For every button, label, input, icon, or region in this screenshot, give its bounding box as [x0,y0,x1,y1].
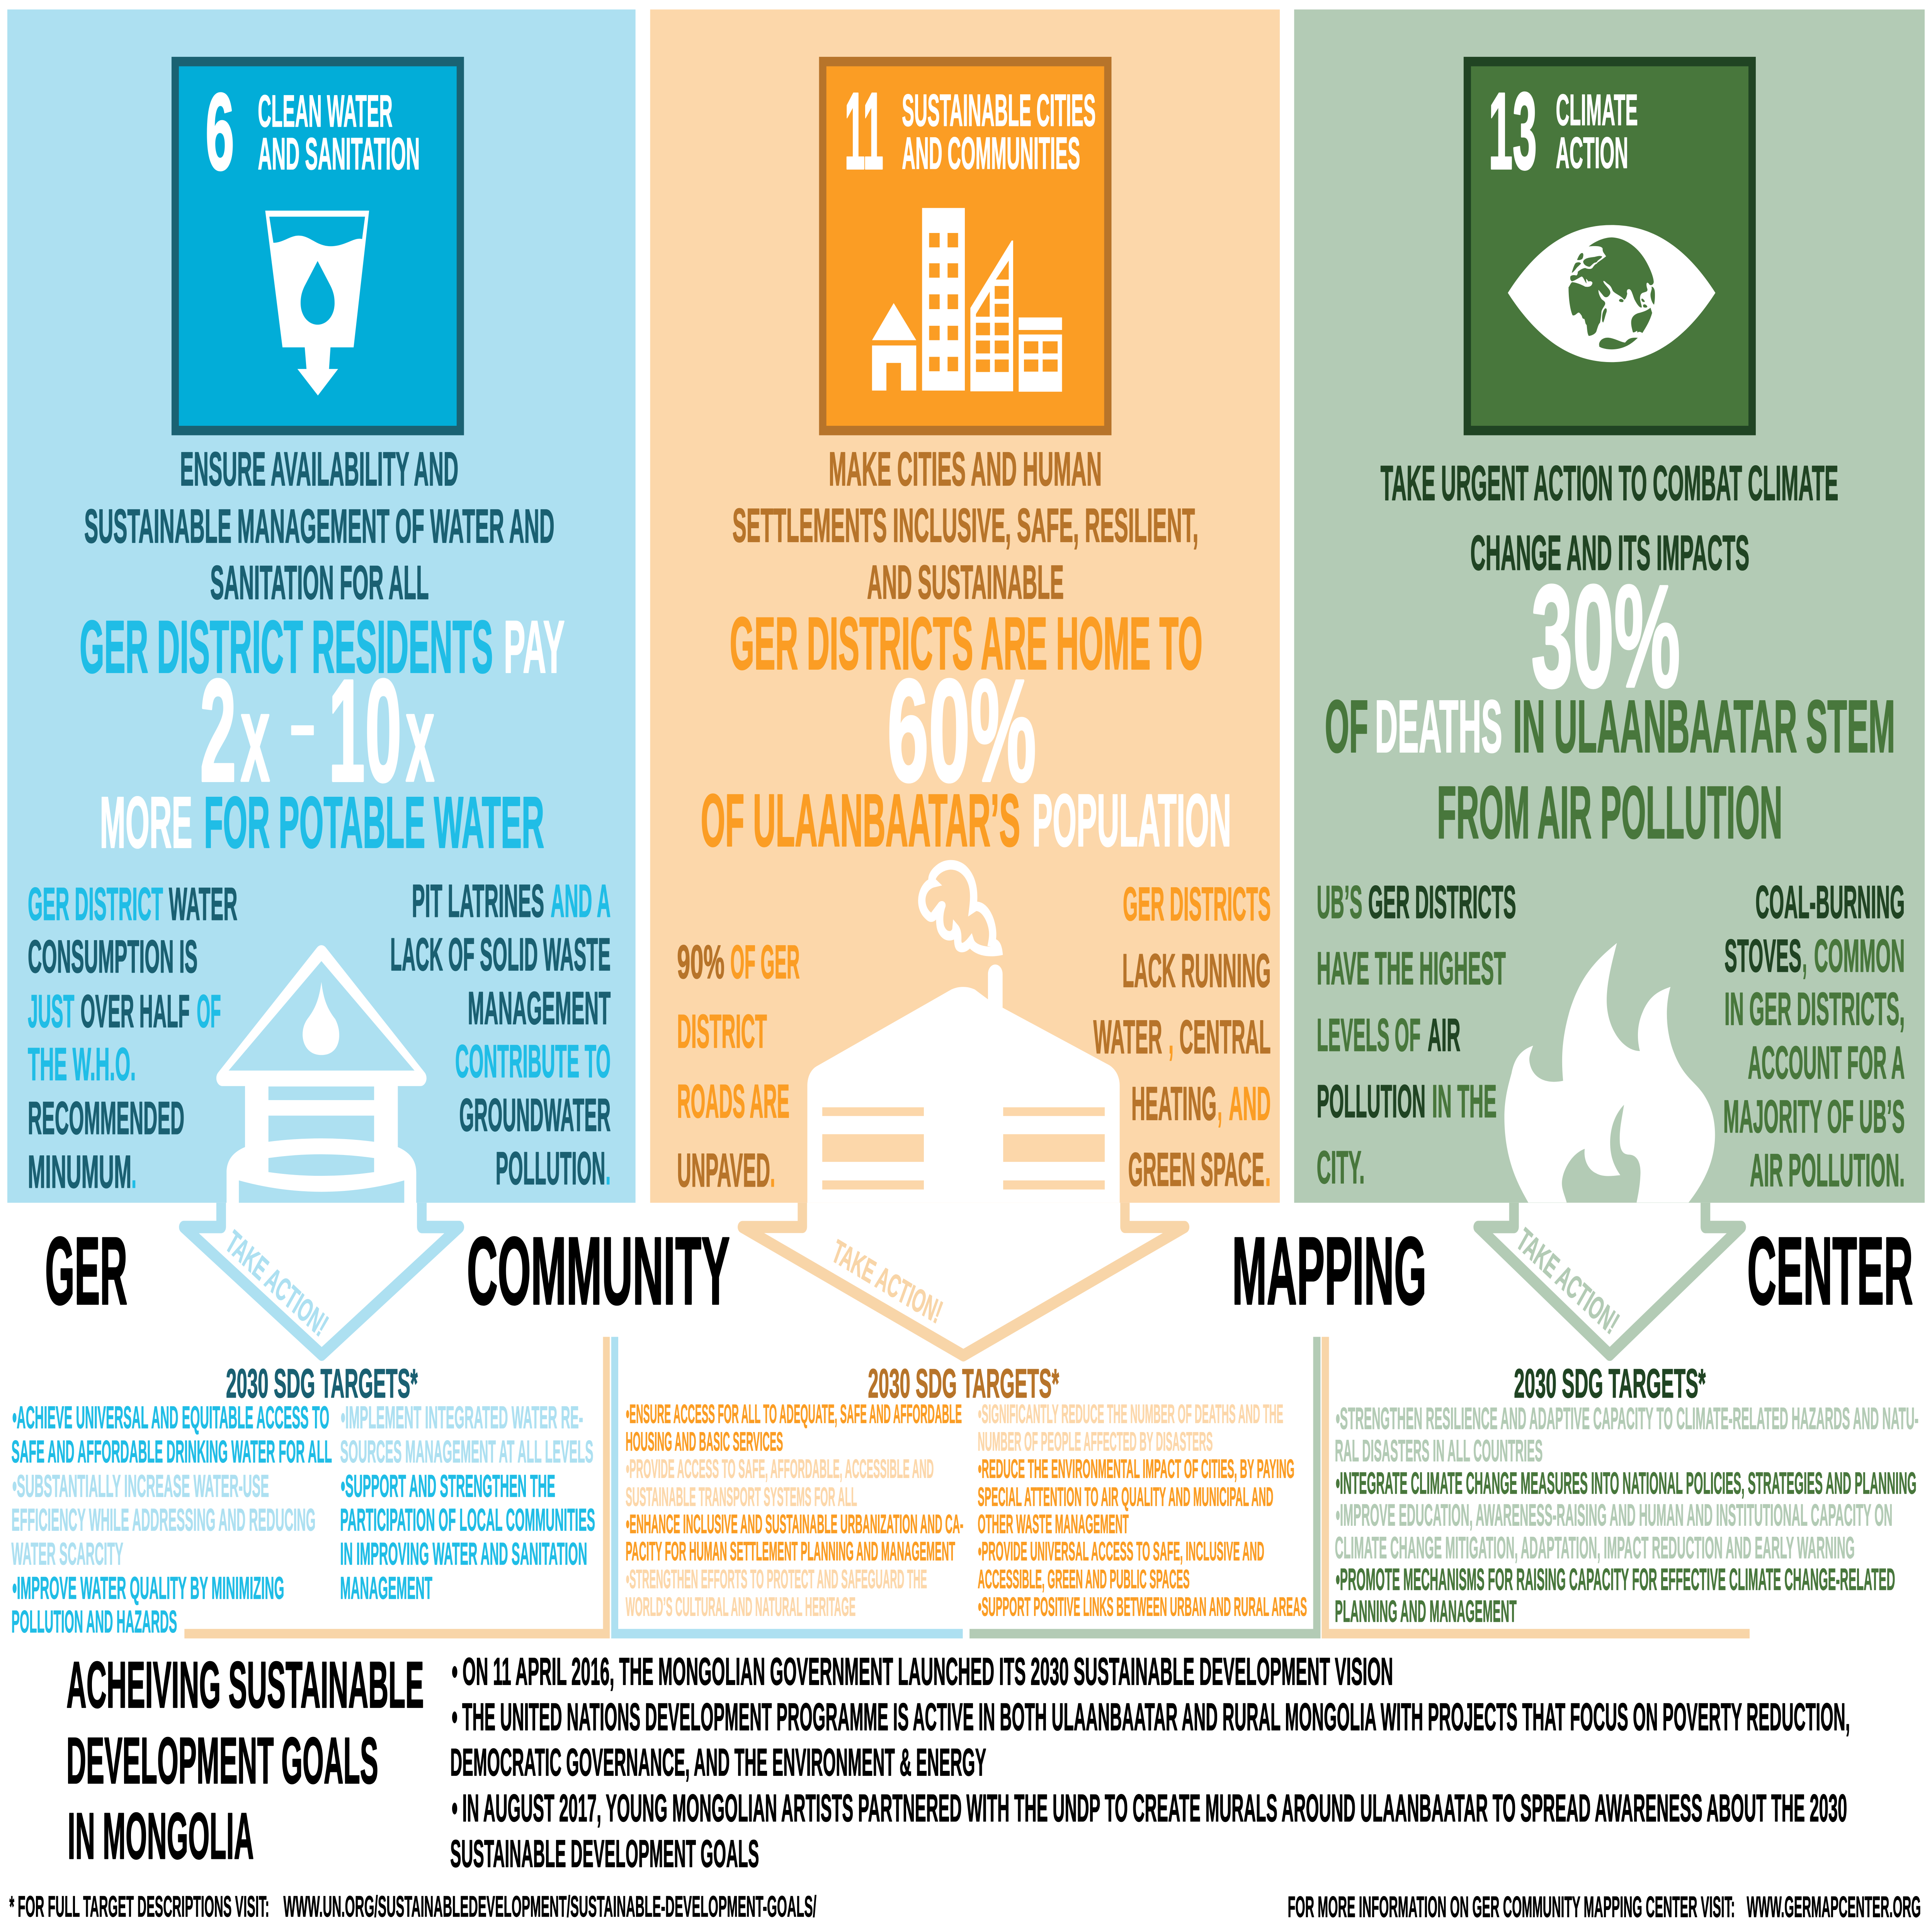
headline statistic: water cost: - [289,684,316,764]
title band: Ger Community Mapping Center: COMMUNITY [467,1217,730,1324]
icon box: SDG 6: 6 [206,71,234,193]
arrow: water take action [184,1203,459,1355]
headline statistic: water cost: PAY [504,605,565,688]
text block: unpaved roads: ROADS ARE [677,1075,789,1128]
targets: cities: ACCESSIBLE, GREEN AND PUBLIC SPACES [978,1564,1190,1594]
text block: groundwater pollution: LACK OF SOLID WASTE [390,929,611,980]
targets: cities: •PROVIDE UNIVERSAL ACCESS TO SAFE, INCLUSIVE AND [978,1536,1264,1566]
text block: water consumption: MINUMUM [28,1146,131,1197]
icon box: SDG 11: SUSTAINABLE CITIES [902,85,1096,136]
panel: SDG 11 sustainable cities: OF GER [730,936,800,988]
text block: groundwater pollution: PIT LATRINES [412,875,544,927]
targets: climate: RAL DISASTERS IN ALL COUNTRIES [1335,1434,1543,1468]
targets heading: water: 2030 SDG TARGETS* [226,1361,418,1406]
icon box: SDG 6 [175,61,460,430]
icon box: SDG 6: CLEAN WATER [258,86,393,136]
text block: lacking services: LACK RUNNING [1122,944,1271,997]
text block: highest pollution levels: GER DISTRICTS [1368,876,1516,928]
headline statistic: water cost: x [241,668,270,807]
text block: water consumption: RECOMMENDED [28,1092,184,1144]
heading: Acheiving Sustainable Development Goals in Mongolia: DEVELOPMENT GOALS [66,1724,378,1797]
text block: lacking services: . [1265,1143,1271,1196]
text block: highest pollution levels: IN THE [1432,1075,1497,1127]
text block: groundwater pollution [390,875,611,1194]
text block: water consumption [28,878,237,1197]
icon: well with water drop [223,953,420,1210]
headline statistic: air pollution deaths: OF [1325,685,1368,768]
text block: water consumption: OF [197,985,221,1037]
frame: orange water targets border [184,1337,610,1638]
footer: target descriptions link: WWW.UN.ORG/SUSTAINABLEDEVELOPMENT/SUSTAINABLE-DEVELOPMENT-GOALS/ [283,1889,816,1923]
panel: SDG 13 climate action [1294,10,1925,1203]
headline statistic: water cost: FOR POTABLE WATER [204,782,544,863]
targets: water: EFFICIENCY WHILE ADDRESSING AND REDUCING [12,1502,316,1537]
text block: water consumption: GER DISTRICT [28,878,163,930]
text block: water consumption: THE W.H.O. [28,1038,136,1090]
footer: target descriptions link: * FOR FULL TARGET DESCRIPTIONS VISIT: [9,1889,269,1923]
icon box: SDG 13: CLIMATE [1556,85,1638,134]
text block: lacking services: HEATING [1131,1077,1216,1130]
footer: target descriptions link [9,1889,816,1923]
text block: lacking services: , [1168,1011,1173,1063]
targets: water: •IMPROVE WATER QUALITY BY MINIMIZING [12,1570,284,1605]
headline statistic: water cost: 2 [200,649,236,812]
text block: Mongolia bullet points: DEMOCRATIC GOVERNANCE, AND THE ENVIRONMENT & ENERGY [450,1741,986,1784]
text block: water consumption: OVER HALF [80,985,190,1037]
text block: groundwater pollution: POLLUTION [496,1143,605,1194]
targets: cities: •ENSURE ACCESS FOR ALL TO ADEQUATE, SAFE AND AFFORDABLE [626,1399,962,1429]
headline statistic: water cost: 10 [328,649,401,812]
goal statement: cities: AND SUSTAINABLE [867,555,1064,609]
targets: cities: •PROVIDE ACCESS TO SAFE, AFFORDABLE, ACCESSIBLE AND [626,1454,934,1483]
text block: Mongolia bullet points [450,1650,1850,1875]
icon: ger with chimney smoke [807,860,1120,1203]
text block: highest pollution levels: UB’S [1317,876,1362,928]
text block: lacking services: GER DISTRICTS [1123,878,1271,930]
headline statistic: water cost: MORE [100,782,192,863]
headline statistic: water cost: GER DISTRICT RESIDENTS [80,605,493,688]
icon box: SDG 11: 11 [845,70,883,192]
targets: cities: HOUSING AND BASIC SERVICES [626,1427,783,1456]
text block: groundwater pollution: MANAGEMENT [468,982,611,1034]
title band: Ger Community Mapping Center: MAPPING [1232,1217,1427,1324]
text block: highest pollution levels: CITY. [1317,1141,1365,1193]
targets: water: •SUPPORT AND STRENGTHEN THE [341,1468,555,1503]
text block: water consumption: CONSUMPTION IS [28,931,197,982]
goal statement: climate [1381,455,1838,580]
text block: water consumption: JUST [28,985,74,1037]
text block: unpaved roads [677,936,800,1197]
text block: highest pollution levels: HAVE THE HIGHEST [1317,942,1506,994]
goal statement: water: SANITATION FOR ALL [210,556,429,609]
icon box: SDG 6: AND SANITATION [258,129,420,179]
arrow: climate take action: TAKE ACTION! [1512,1221,1624,1341]
goal statement: water: SUSTAINABLE MANAGEMENT OF WATER AND [84,499,554,553]
targets: water [12,1361,595,1639]
headline statistic: water cost [80,605,565,863]
text block: coal-burning stoves: STOVES [1725,930,1801,981]
targets: water: WATER SCARCITY [12,1536,123,1571]
targets heading: cities: 2030 SDG TARGETS* [868,1361,1059,1406]
icon box: SDG 13 [1467,61,1752,430]
arrow: cities take action [742,1203,1185,1355]
text block: lacking services: CENTRAL [1179,1011,1271,1063]
text block: lacking services: WATER [1094,1011,1162,1063]
icon: flame [1504,943,1715,1202]
text block: highest pollution levels: AIR [1428,1009,1461,1061]
title band: Ger Community Mapping Center [45,1217,1913,1324]
arrow: water take action: TAKE ACTION! [221,1224,333,1344]
targets: cities: NUMBER OF PEOPLE AFFECTED BY DISASTERS [978,1427,1213,1456]
headline statistic: population [701,602,1231,862]
text: •SUPPORT POSITIVE LINKS BETWEEN URBAN AND RURAL AREAS [978,1592,1307,1621]
targets: cities: •SIGNIFICANTLY REDUCE THE NUMBER OF DEATHS AND THE [978,1399,1283,1429]
text block: highest pollution levels: POLLUTION [1317,1075,1425,1127]
targets: water: POLLUTION AND HAZARDS [12,1604,177,1639]
text block: groundwater pollution: . [605,1143,611,1194]
icon box: SDG 13: ACTION [1556,128,1628,177]
text block: unpaved roads: . [770,1144,775,1197]
icon box: SDG 13: 13 [1488,70,1537,192]
targets: water: •IMPLEMENT INTEGRATED WATER RE- [341,1400,583,1435]
heading: Acheiving Sustainable Development Goals in Mongolia [66,1648,424,1872]
goal statement: cities: MAKE CITIES AND HUMAN [829,442,1102,495]
headline statistic: air pollution deaths: 30% [1531,555,1680,718]
icon box: SDG 11 [823,61,1108,430]
goal statement: cities: SETTLEMENTS INCLUSIVE, SAFE, RESILIENT, [732,498,1199,552]
frame: green cities targets border [969,1337,1320,1638]
targets: cities: PACITY FOR HUMAN SETTLEMENT PLANNING AND MANAGEMENT [626,1536,955,1566]
targets: climate: PLANNING AND MANAGEMENT [1335,1594,1517,1629]
arrow: climate take action [1478,1203,1741,1355]
targets: water: •SUBSTANTIALLY INCREASE WATER-USE [12,1468,269,1503]
targets heading: climate: 2030 SDG TARGETS* [1514,1361,1706,1406]
headline statistic: air pollution deaths: DEATHS [1375,685,1502,768]
heading: Acheiving Sustainable Development Goals in Mongolia: ACHEIVING SUSTAINABLE [66,1648,424,1721]
goal statement: water [84,442,554,609]
text block: unpaved roads: UNPAVED [677,1144,770,1197]
targets: cities: •ENHANCE INCLUSIVE AND SUSTAINABLE URBANIZATION AND CA- [626,1509,963,1539]
text block: unpaved roads: DISTRICT [677,1005,767,1058]
text block: lacking services: GREEN SPACE [1128,1143,1264,1196]
headline statistic: air pollution deaths [1325,555,1895,854]
text block: groundwater pollution: CONTRIBUTE TO [455,1035,611,1087]
targets: water: MANAGEMENT [340,1570,432,1605]
targets: cities: WORLD’S CULTURAL AND NATURAL HERITAGE [626,1592,855,1621]
text block: lacking services: , [1218,1077,1222,1130]
icon box: SDG 11: AND COMMUNITIES [902,128,1080,179]
panel: SDG 11 sustainable cities [650,10,1280,1203]
title band: Ger Community Mapping Center: GER [45,1217,128,1324]
targets: cities: •STRENGTHEN EFFORTS TO PROTECT AND SAFEGUARD THE [626,1564,927,1594]
text block: water consumption: WATER [169,878,237,930]
targets: cities: SUSTAINABLE TRANSPORT SYSTEMS FOR ALL [626,1482,857,1512]
headline statistic: population: OF ULAANBAATAR’S [701,779,1020,862]
arrow: cities take action: TAKE ACTION! [828,1233,947,1331]
text block: water consumption: . [131,1146,136,1197]
targets: cities: •REDUCE THE ENVIRONMENTAL IMPACT OF CITIES, BY PAYING [978,1454,1294,1483]
text block: lacking services [1094,878,1271,1196]
targets: cities [626,1361,1307,1621]
goal statement: water: ENSURE AVAILABILITY AND [180,442,458,495]
text block: coal-burning stoves [1723,876,1905,1196]
goal statement: cities [732,442,1199,609]
frame: blue cities targets border [611,1337,963,1638]
headline statistic: population: POPULATION [1032,779,1231,862]
headline statistic: population: 60% [887,649,1036,812]
frame: orange climate targets border [1321,1337,1750,1638]
heading: Acheiving Sustainable Development Goals in Mongolia: IN MONGOLIA [68,1799,254,1872]
targets: water: SAFE AND AFFORDABLE DRINKING WATER FOR ALL [12,1434,332,1469]
panel: SDG 6 clean water [7,10,636,1210]
headline statistic: water cost: x [406,668,435,807]
text block: coal-burning stoves: , [1802,930,1807,981]
text block: Mongolia bullet points: SUSTAINABLE DEVELOPMENT GOALS [450,1832,759,1875]
text block: unpaved roads: 90% [677,936,724,988]
text block: highest pollution levels [1317,876,1516,1193]
targets: climate [1335,1361,1918,1629]
text block: groundwater pollution: AND A [551,875,611,927]
targets: cities: OTHER WASTE MANAGEMENT [978,1509,1129,1539]
targets: water: •ACHIEVE UNIVERSAL AND EQUITABLE ACCESS TO [12,1400,329,1435]
targets: water: IN IMPROVING WATER AND SANITATION [340,1536,587,1571]
text block: groundwater pollution: GROUNDWATER [459,1089,611,1141]
targets: water: SOURCES MANAGEMENT AT ALL LEVELS [340,1434,594,1469]
targets: cities: SPECIAL ATTENTION TO AIR QUALITY AND MUNICIPAL AND [978,1482,1273,1512]
targets: water: PARTICIPATION OF LOCAL COMMUNITIES [340,1502,595,1537]
text block: lacking services: AND [1229,1077,1271,1130]
text block: highest pollution levels: LEVELS OF [1317,1009,1421,1061]
headline statistic: population: GER DISTRICTS ARE HOME TO [730,602,1202,685]
